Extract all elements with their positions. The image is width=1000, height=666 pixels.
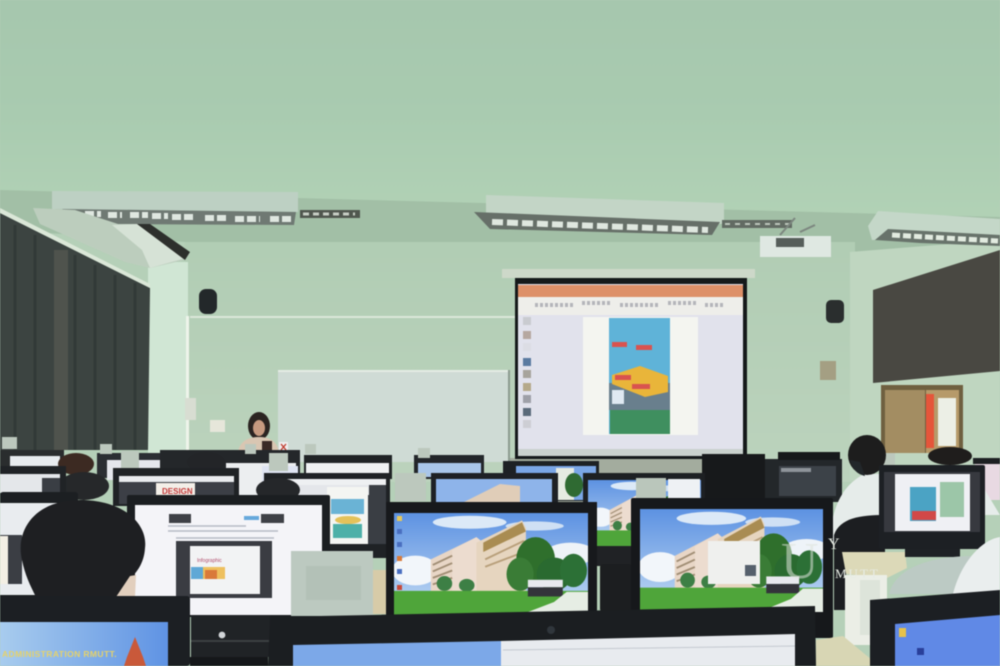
- back monitor 5: [414, 455, 484, 479]
- editor white page: [190, 546, 260, 594]
- person back centre: [187, 452, 225, 472]
- student head foreground: [21, 500, 145, 597]
- DESIGN monitor: DESIGN: [162, 487, 193, 496]
- ceiling light right: [868, 211, 1000, 246]
- right side desk: [842, 552, 907, 645]
- speaker right: [826, 300, 844, 323]
- wall section edge: [186, 316, 189, 450]
- back row monitors: [0, 450, 842, 502]
- second row monitor centre right: [583, 473, 706, 548]
- infographic thumbnail: [191, 558, 225, 579]
- dialog box: [708, 541, 760, 584]
- wallpaper screen: [638, 509, 830, 612]
- editor toolbar: [169, 514, 284, 523]
- dark wall panel right: [873, 250, 1000, 383]
- paper card centre: [291, 551, 373, 616]
- watermark: MUTT: [835, 566, 880, 581]
- watermark: [781, 533, 880, 590]
- lower wall band behind monitors: [510, 458, 705, 503]
- projection screen: [502, 269, 755, 459]
- back monitor 4: [304, 455, 392, 479]
- hand near card: [373, 570, 386, 614]
- infographic thumbnail: Infographic: [197, 558, 222, 564]
- back monitor 2: [97, 453, 182, 480]
- projector: [760, 218, 831, 257]
- bezel: [631, 498, 833, 638]
- screen frame: [515, 278, 747, 459]
- monitor stand: [905, 549, 960, 557]
- desktop monitor with campus wallpaper right: [631, 498, 880, 638]
- ceiling light left: [52, 191, 360, 225]
- monitor with brochure: [879, 465, 985, 557]
- infographic poster: [609, 318, 670, 434]
- back monitor 6: [503, 461, 599, 501]
- watermark: Y: [828, 536, 840, 553]
- wallpaper screen: [392, 513, 596, 615]
- dark monitor: [702, 454, 765, 500]
- monitor right foreground: [870, 590, 1000, 666]
- poster monitor: [264, 473, 390, 558]
- logo: [219, 632, 225, 638]
- monitor with infographic editor: [127, 495, 330, 666]
- bezel: [386, 502, 597, 617]
- building monitor: [431, 473, 558, 508]
- screen housing: [502, 269, 755, 278]
- back sheet dividers: [2, 437, 895, 501]
- air conditioner: [33, 208, 190, 268]
- wall socket panel: [820, 361, 836, 380]
- monitor left foreground: ADMINISTRATION RMUTT.: [2, 649, 117, 659]
- powerpoint thumbnails: [523, 317, 531, 428]
- speaker left: [199, 289, 217, 314]
- editor dark page: [176, 541, 272, 598]
- person back left: [58, 453, 109, 500]
- curtains left: [0, 208, 150, 450]
- dark stand below second row: [597, 546, 633, 566]
- powerpoint ribbon: [518, 297, 743, 315]
- person back head centre: [256, 478, 300, 502]
- left column: [148, 262, 188, 457]
- desk right foreground: [816, 636, 872, 666]
- student far right: [928, 447, 1000, 515]
- editor text lines: [168, 526, 278, 538]
- DESIGN monitor: [113, 468, 239, 506]
- desktop icons: [397, 516, 402, 590]
- slide page: [583, 317, 698, 435]
- ceiling light centre: [474, 195, 792, 235]
- monitor screen: [135, 505, 322, 615]
- dark monitor with CAD screen: [765, 452, 842, 502]
- watermark: U: [781, 533, 819, 590]
- wall switch: [185, 398, 196, 420]
- powerpoint title bar: [518, 285, 743, 297]
- wall trim line: [190, 316, 515, 318]
- monitor left foreground: [0, 596, 190, 666]
- right wall: [850, 240, 1000, 480]
- presenter: [238, 412, 279, 452]
- back monitor far left: [0, 450, 64, 475]
- whiteboard: [278, 370, 510, 462]
- background: upper wall: [0, 0, 1000, 222]
- white shirt foreground right: [953, 537, 1000, 596]
- second row left monitor: [0, 466, 66, 495]
- door: [881, 385, 963, 453]
- ceiling soffit: [0, 190, 1000, 252]
- keyboard: [190, 657, 268, 666]
- student right: [829, 435, 886, 545]
- back monitor 3: [160, 450, 300, 499]
- chair back: [834, 515, 885, 610]
- monitor bezel: [127, 495, 330, 617]
- grey item on foreground student: [889, 556, 975, 594]
- desktop monitor with campus wallpaper centre: [386, 502, 597, 617]
- monitor centre foreground: [268, 606, 816, 666]
- black case between monitors: [600, 564, 632, 612]
- sign on wall: [210, 420, 225, 432]
- monitor stand: [191, 615, 270, 657]
- back wall: [185, 242, 855, 482]
- sign with red cross: [279, 442, 288, 452]
- taskbar: [518, 449, 743, 456]
- screen surface: [518, 284, 743, 451]
- far left second-row monitor: [0, 492, 78, 602]
